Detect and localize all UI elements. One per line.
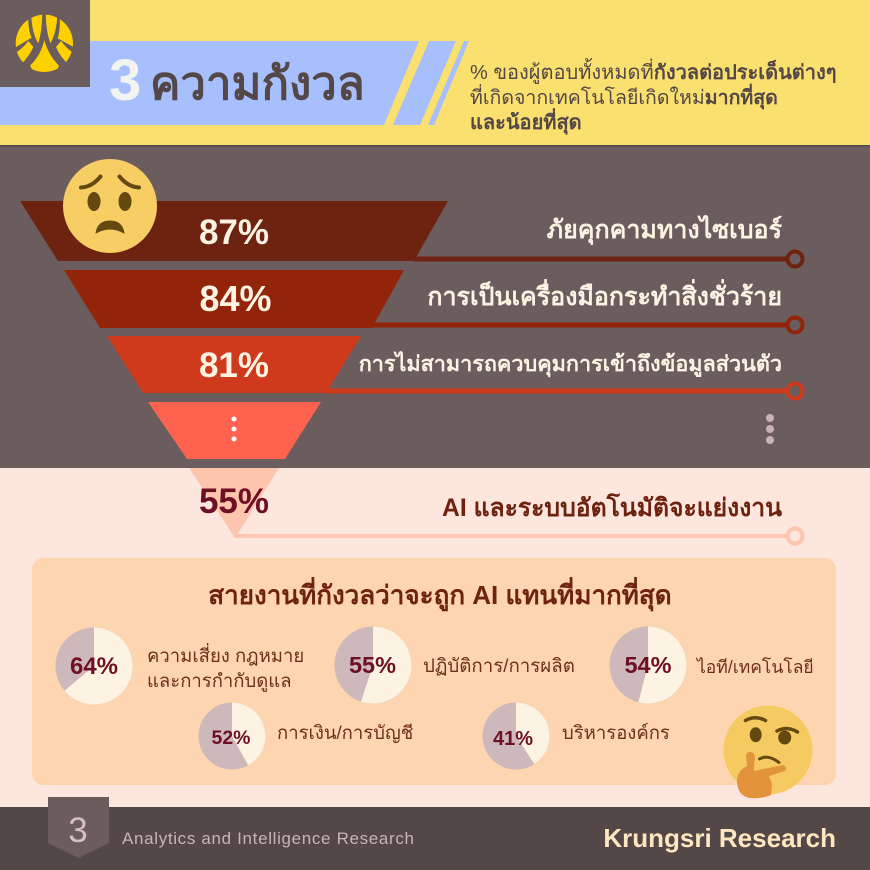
funnel tier 2: 84%: 84% (199, 278, 272, 319)
subtitle text: ที่เกิดจากเทคโนโลยีเกิดใหม่มากที่สุด (470, 83, 778, 110)
subtitle text: % ของผู้ตอบทั้งหมดที่กังวลต่อประเด็นต่างๆ (470, 58, 836, 85)
pie: 54% IT: 54% (624, 652, 672, 678)
panel heading: สายงานที่กังวลว่าจะถูก AI แทนที่มากที่สุด (208, 576, 672, 612)
pie: 64% legal and compliance (56, 628, 304, 704)
icon: worried face emoji (63, 159, 157, 253)
subtitle text (470, 58, 836, 135)
title band (0, 41, 469, 125)
page number badge: 3 (68, 811, 88, 850)
funnel tier 5: 55%: AI และระบบอัตโนมัติจะแย่งงาน (442, 493, 782, 522)
pie: 41% management: บริหารองค์กร (562, 722, 670, 743)
pie: 52% finance: 52% (211, 727, 251, 749)
title number: 3 (109, 48, 141, 113)
pie: 55% operations: 55% (349, 652, 396, 678)
funnel tier 1: 87% (20, 201, 802, 266)
funnel tier 3: 81%: การไม่สามารถควบคุมการเข้าถึงข้อมูลส่วนตัว (359, 351, 782, 378)
page number badge (48, 797, 109, 858)
funnel tier 1: 87%: 87% (199, 213, 269, 252)
pie: 41% management (482, 702, 670, 770)
header panel (0, 0, 870, 146)
icon: thinking face emoji (724, 706, 812, 798)
title text: ความกังวล (150, 58, 365, 109)
pie: 55% operations (334, 626, 575, 704)
funnel tier 1: 87%: ภัยคุกคามทางไซเบอร์ (547, 214, 783, 246)
department name: Analytics and Intelligence Research (122, 829, 414, 848)
funnel tier 2: 84%: การเป็นเครื่องมือกระทำสิ่งชั่วร้าย (427, 279, 782, 311)
brand name: Krungsri Research (603, 823, 836, 853)
pie: 41% management: 41% (493, 728, 533, 750)
funnel tier 5: 55% (189, 468, 802, 544)
panel: top concerns background (0, 145, 870, 468)
footer bar (0, 797, 870, 870)
funnel tier 3: 81% (107, 336, 802, 398)
pie: 54% IT (610, 626, 814, 704)
pie: 64% legal and compliance: 64% (70, 653, 118, 680)
funnel tier 2: 84% (64, 270, 802, 332)
pie: 64% legal and compliance: และการกำกับดูแล (147, 670, 292, 692)
pie: 52% finance (198, 702, 413, 770)
pie: 55% operations: ปฏิบัติการ/การผลิต (423, 655, 575, 676)
subtitle text: และน้อยที่สุด (470, 107, 582, 135)
funnel tier 4: omitted items (148, 402, 321, 459)
pie: 54% IT: ไอที/เทคโนโลยี (695, 657, 814, 677)
funnel tier 3: 81%: 81% (199, 346, 269, 385)
ellipsis marker (766, 414, 774, 444)
pie: 64% legal and compliance: ความเสี่ยง กฎหมาย (147, 643, 304, 666)
panel: jobs most worried about AI replacement (32, 558, 836, 785)
logo: Krungsri emblem (0, 0, 90, 87)
funnel tier 5: 55%: 55% (199, 482, 269, 521)
pie: 52% finance: การเงิน/การบัญชี (277, 722, 413, 744)
